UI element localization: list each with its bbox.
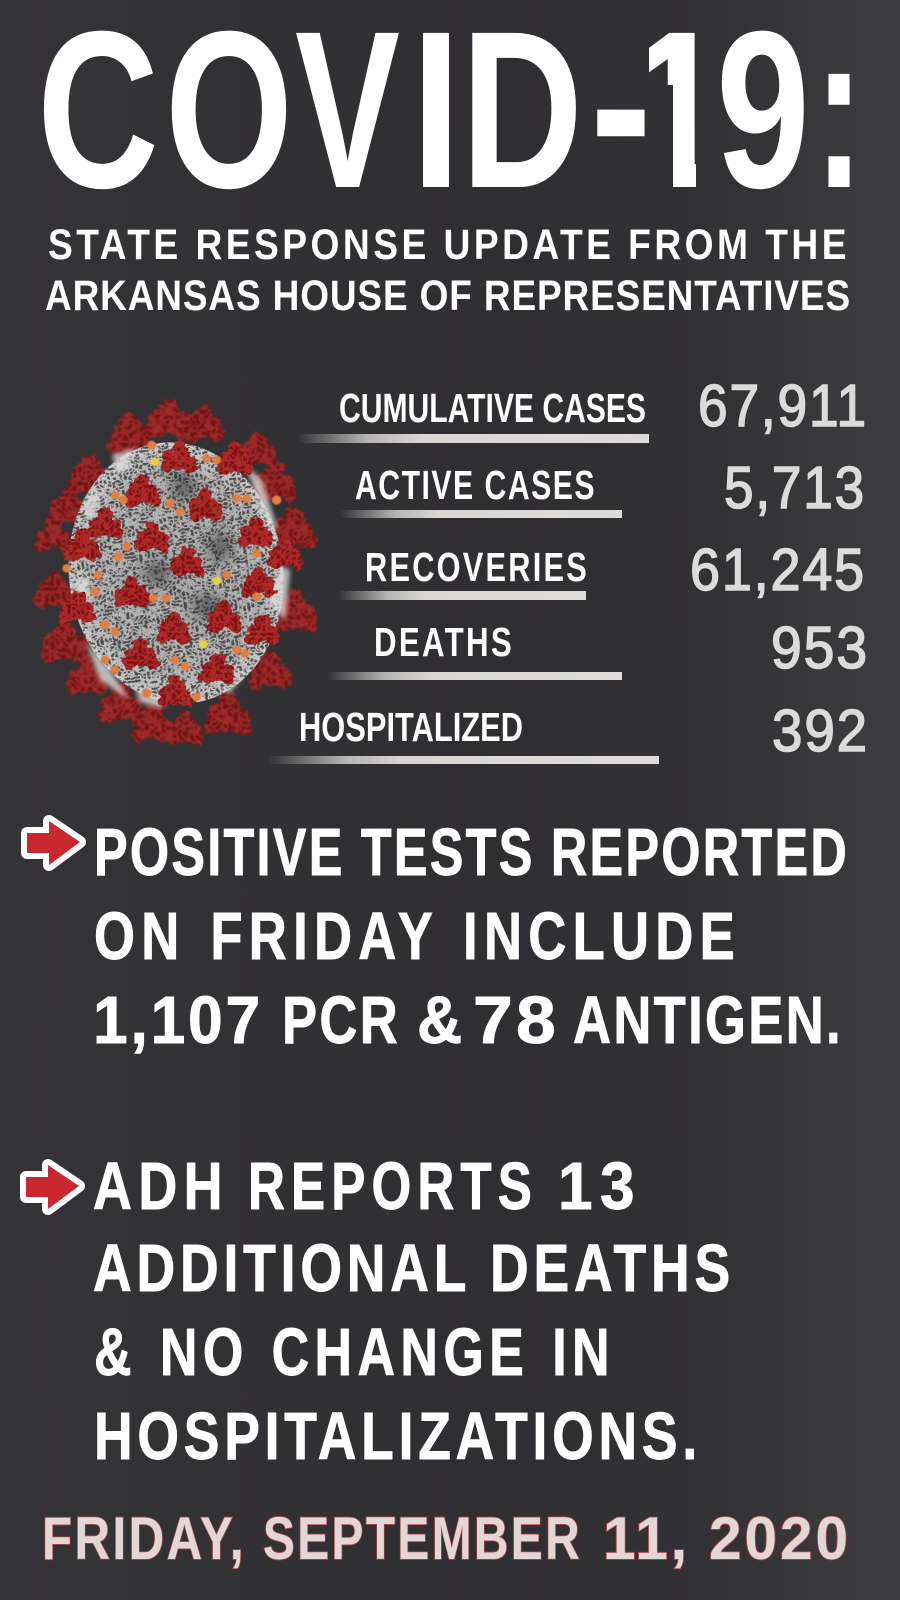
inner spikes — [59, 441, 303, 707]
stat: cumulative cases — [297, 373, 868, 443]
bullet: ADH report: ADH — [93, 1149, 229, 1224]
bullet: positive tests — [93, 815, 849, 1058]
bullet: ADH report: 13 — [558, 1149, 642, 1224]
date footer: SEPTEMBER — [263, 1505, 582, 1572]
bullet: ADH report: ADDITIONAL DEATHS — [93, 1231, 735, 1306]
title — [44, 30, 850, 190]
stat: hospitalized: HOSPITALIZED — [299, 704, 523, 750]
dark surface shadows — [143, 473, 232, 619]
bullet: ADH report: HOSPITALIZATIONS. — [94, 1399, 702, 1474]
virus illustration — [34, 398, 318, 745]
orange protein dots — [62, 441, 281, 701]
bullet: positive tests: & — [417, 983, 465, 1058]
stat: hospitalized: 392 — [772, 698, 869, 764]
statistics table — [268, 373, 869, 764]
sphere body — [52, 428, 300, 718]
bullet: positive tests: 1,107 — [93, 983, 263, 1058]
bullet: positive tests: ON FRIDAY INCLUDE — [94, 899, 741, 974]
icon: arrow 2 — [26, 1165, 79, 1209]
stat: cumulative cases: CUMULATIVE CASES — [339, 385, 646, 431]
date footer: FRIDAY, — [42, 1505, 246, 1572]
stat: active cases: 5,713 — [724, 455, 866, 521]
subtitle — [45, 221, 851, 320]
date footer: 11, — [603, 1505, 690, 1572]
bullet: ADH report: REPORTS — [248, 1149, 538, 1224]
stat: hospitalized — [268, 698, 869, 764]
date footer: 2020 — [709, 1505, 851, 1572]
outer spikes — [34, 398, 318, 745]
stat: recoveries: RECOVERIES — [365, 544, 589, 590]
stat: active cases — [340, 455, 866, 521]
stat: deaths: 953 — [771, 615, 869, 681]
yellow protein dots — [151, 457, 221, 648]
bullet: positive tests: 78 — [473, 983, 559, 1058]
stat: deaths: DEATHS — [374, 619, 514, 665]
bullet: positive tests: PCR — [282, 983, 400, 1058]
stat: recoveries: 61,245 — [690, 537, 866, 603]
stat: cumulative cases: 67,911 — [698, 373, 868, 439]
icon: arrow 1 — [27, 821, 80, 865]
date footer — [42, 1505, 851, 1572]
stat: active cases: ACTIVE CASES — [355, 462, 596, 508]
bullet: ADH report — [93, 1149, 735, 1474]
pale rim highlights — [74, 448, 290, 708]
bullet: ADH report: & NO CHANGE IN — [94, 1315, 615, 1390]
stat: recoveries — [338, 537, 866, 603]
stat: deaths — [327, 615, 869, 681]
